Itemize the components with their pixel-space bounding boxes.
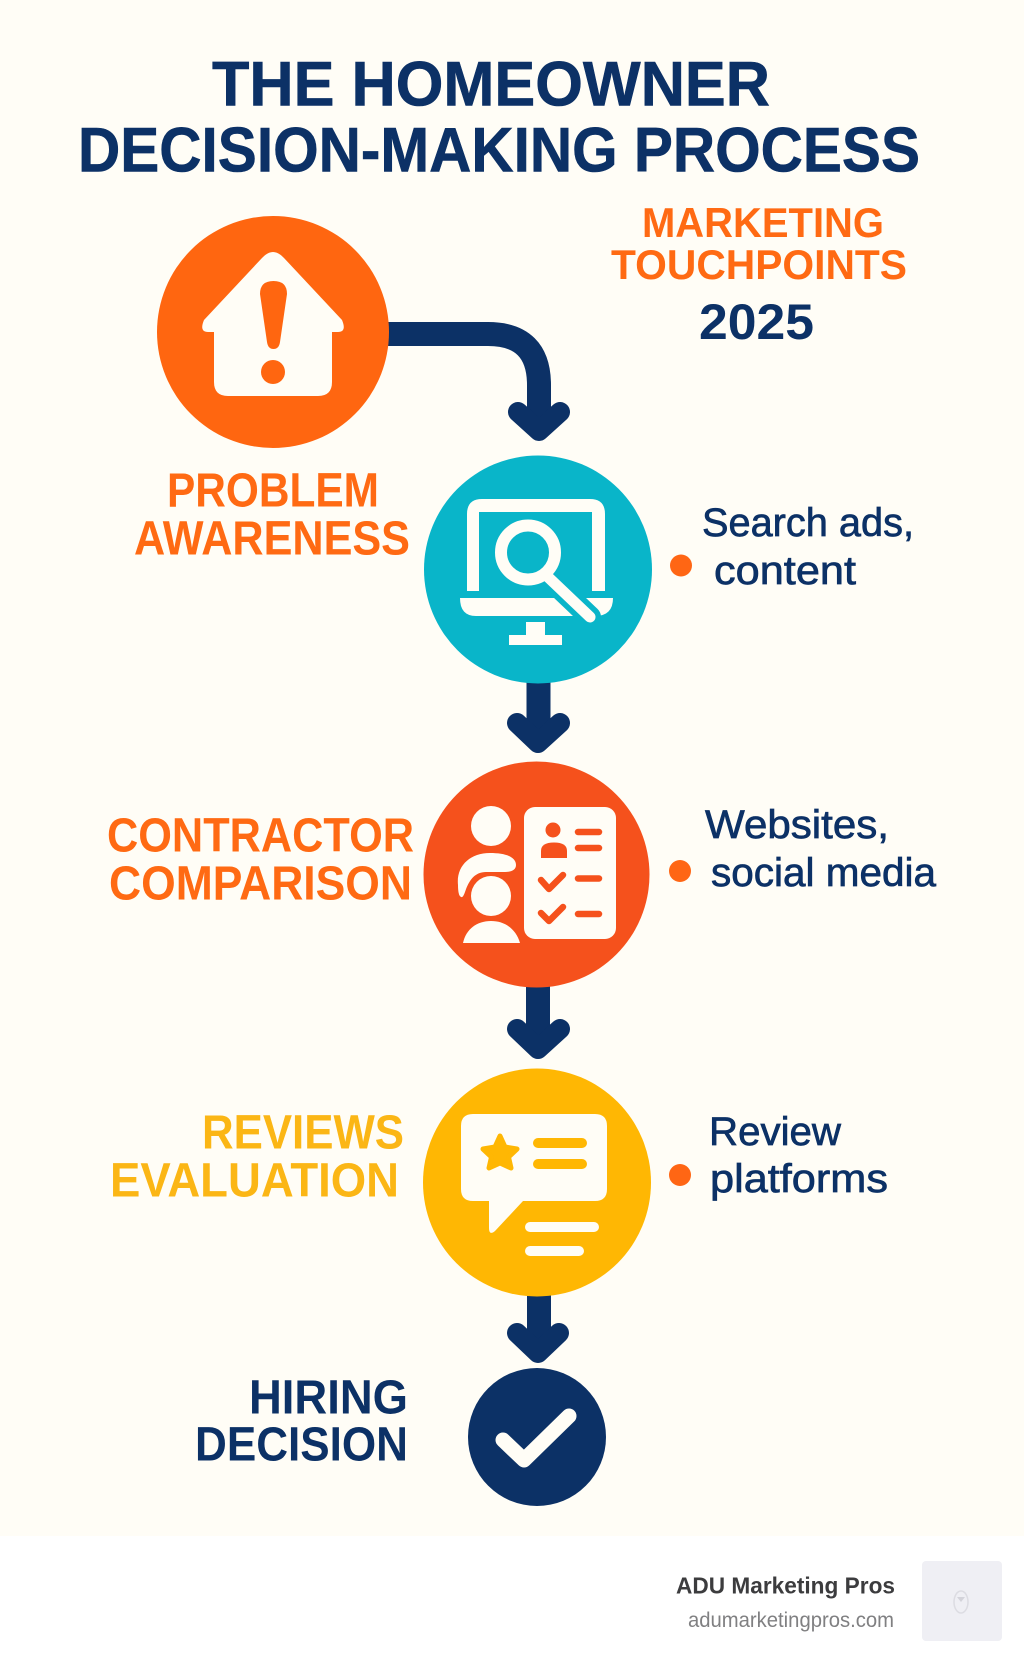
- heading: marketing touchpoints 2025: TOUCHPOINTS: [611, 241, 907, 288]
- label: contractor comparison: [107, 810, 414, 910]
- label: problem awareness: AWARENESS: [134, 512, 410, 566]
- icon: problem awareness house alert: [157, 216, 389, 448]
- footer logo placeholder: [922, 1561, 1002, 1641]
- heading: marketing touchpoints 2025: MARKETING: [642, 199, 884, 246]
- arrow: search to comparison: [517, 680, 560, 743]
- icon: search on monitor: [424, 456, 652, 684]
- label: problem awareness: PROBLEM: [167, 464, 379, 518]
- text: review platforms: platforms: [710, 1157, 888, 1201]
- text: websites, social media: Websites,: [705, 803, 889, 847]
- text: search ads, content: [702, 501, 914, 593]
- title: [78, 50, 920, 186]
- label: contractor comparison: COMPARISON: [109, 858, 412, 910]
- label: hiring decision: [195, 1372, 408, 1472]
- footer brand text: adumarketingpros.com: [688, 1609, 894, 1632]
- arrow: problem awareness to search: [385, 334, 560, 431]
- text: review platforms: Review: [709, 1110, 841, 1154]
- heading: marketing touchpoints 2025: [611, 199, 907, 350]
- icon: reviews speech bubble with star: [423, 1068, 651, 1296]
- label: hiring decision: DECISION: [195, 1418, 408, 1472]
- title: THE HOMEOWNER: [212, 50, 770, 120]
- text: websites, social media: social media: [711, 851, 937, 895]
- arrow: comparison to reviews: [517, 984, 560, 1049]
- dot: websites touchpoint: [669, 860, 691, 882]
- title: DECISION-MAKING PROCESS: [78, 116, 920, 186]
- footer brand text: [676, 1572, 895, 1632]
- heading: marketing touchpoints 2025: 2025: [699, 294, 814, 350]
- text: search ads, content: Search ads,: [702, 501, 914, 545]
- icon: contractor comparison people and checklist: [424, 762, 650, 988]
- text: websites, social media: [705, 803, 937, 895]
- text: review platforms: [709, 1110, 888, 1201]
- dot: search touchpoint: [670, 554, 692, 576]
- arrow: reviews to hiring: [517, 1294, 559, 1353]
- label: reviews evaluation: EVALUATION: [110, 1154, 399, 1208]
- label: contractor comparison: CONTRACTOR: [107, 810, 414, 862]
- label: problem awareness: [134, 464, 410, 566]
- label: reviews evaluation: [110, 1106, 404, 1208]
- label: hiring decision: HIRING: [249, 1372, 408, 1424]
- dot: review platforms touchpoint: [669, 1164, 691, 1186]
- text: search ads, content: content: [714, 549, 856, 593]
- icon: hiring decision check mark: [468, 1368, 606, 1506]
- label: reviews evaluation: REVIEWS: [202, 1106, 404, 1160]
- footer brand text: ADU Marketing Pros: [676, 1572, 895, 1598]
